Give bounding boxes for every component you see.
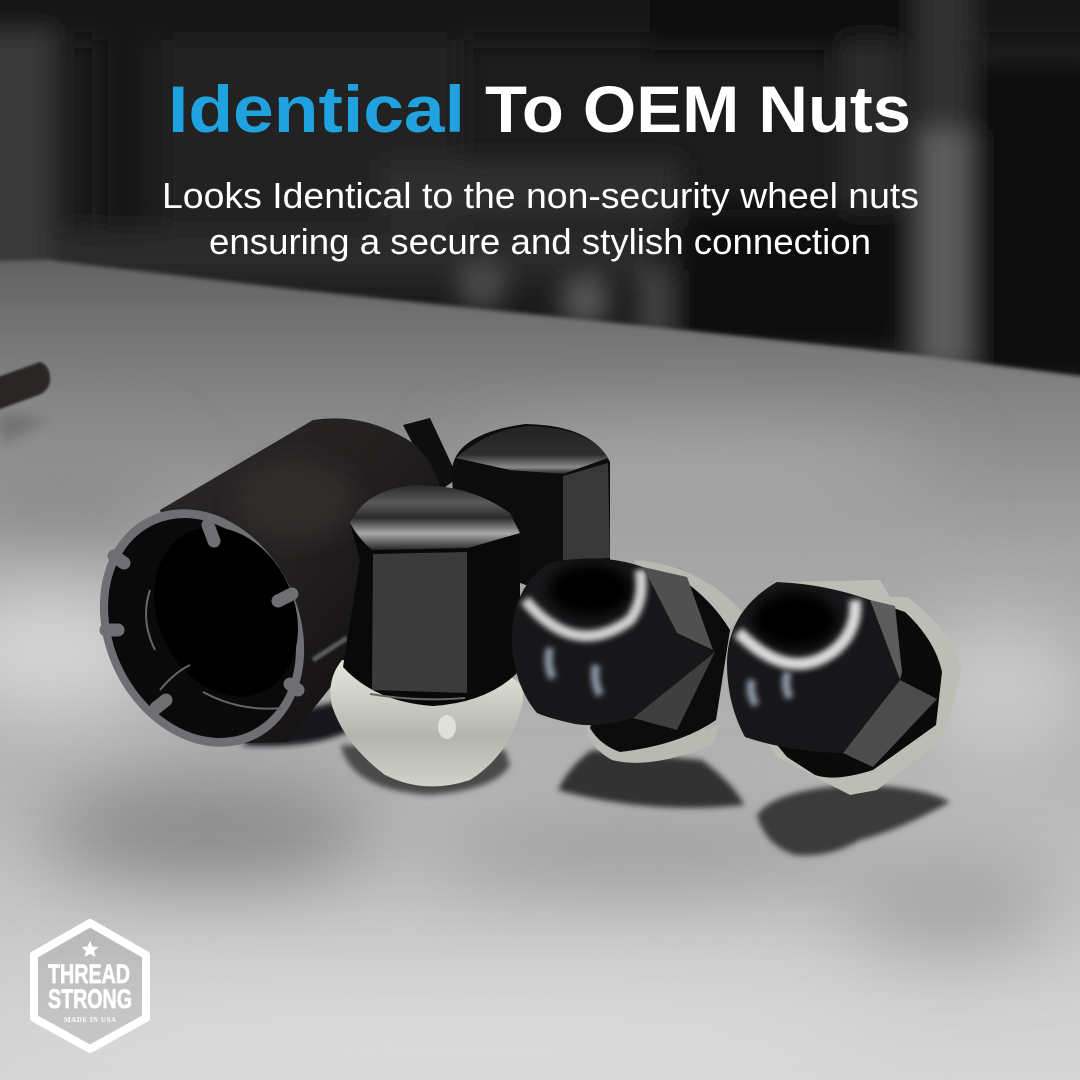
logo: Thread Strong badge: THREAD: [48, 959, 130, 989]
product: tilted lug nut two: [727, 580, 962, 795]
logo: Thread Strong badge: [34, 923, 146, 1049]
dome: [512, 558, 715, 725]
product shadows: [240, 700, 950, 855]
washer: [740, 580, 962, 795]
logo: Thread Strong badge: STRONG: [48, 984, 132, 1014]
product: tilted lug nut one: [512, 558, 742, 763]
subtitle: [162, 175, 919, 262]
product: socket key tool: [62, 418, 440, 780]
hex facets: [870, 600, 902, 680]
socket bore: [127, 504, 325, 720]
table surface: [0, 260, 1080, 1080]
nut body: [343, 485, 520, 706]
logo: Thread Strong badge: MADE IN USA: [64, 1016, 116, 1024]
washer: [586, 560, 742, 763]
product: upright lug nut: [330, 485, 523, 786]
hex facets: [643, 567, 713, 650]
dome: [727, 582, 900, 753]
product: rear nut: [403, 418, 610, 590]
title: To OEM Nuts: [485, 72, 911, 146]
socket rim: [62, 476, 342, 780]
socket inner lobes: [106, 525, 298, 708]
nut dome highlight: [350, 485, 520, 550]
chrome seat: [330, 660, 523, 786]
blurred rod at left edge: [0, 362, 50, 445]
title: [168, 72, 911, 146]
nut flat face: [372, 552, 467, 693]
subtitle: ensuring a secure and stylish connection: [209, 221, 871, 262]
title: Identical: [168, 72, 465, 146]
subtitle: Looks Identical to the non-security wheel nuts: [162, 175, 919, 216]
